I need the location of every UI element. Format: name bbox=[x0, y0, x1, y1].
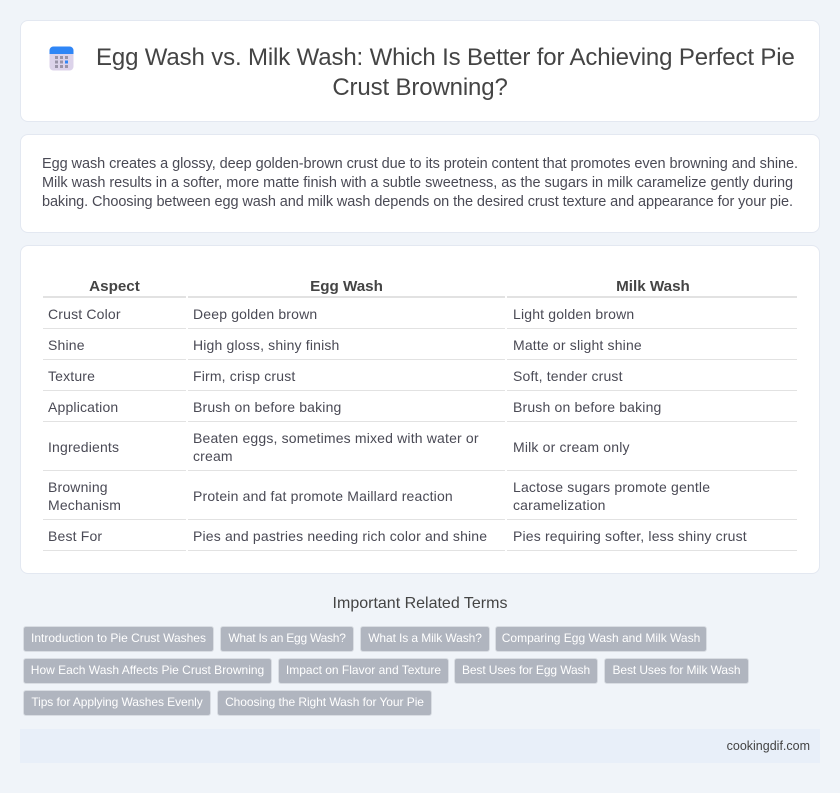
comparison table: High gloss, shiny finish bbox=[193, 337, 339, 353]
comparison table: cream bbox=[193, 448, 233, 464]
comparison table: Milk or cream only bbox=[513, 439, 630, 455]
comparison table: Firm, crisp crust bbox=[193, 368, 295, 384]
tags: related terms: Best Uses for Milk Wash bbox=[613, 663, 740, 677]
intro text: Milk wash results in a softer, more matte finish with a subtle sweetness, as the sugars in milk caramelize gently during bbox=[42, 175, 793, 191]
panel: comparison table bbox=[20, 245, 820, 574]
tags: related terms: How Each Wash Affects Pie Crust Browning bbox=[31, 663, 264, 677]
comparison table: Browning bbox=[48, 479, 108, 495]
intro text: baking. Choosing between egg wash and milk wash depends on the desired crust texture and appearance for your pie. bbox=[42, 194, 793, 210]
comparison table: Pies requiring softer, less shiny crust bbox=[513, 528, 747, 544]
comparison table: Shine bbox=[48, 337, 85, 353]
comparison table: Soft, tender crust bbox=[513, 368, 623, 384]
tags: related terms: Tips for Applying Washes Evenly bbox=[31, 695, 203, 709]
comparison table: Protein and fat promote Maillard reaction bbox=[193, 488, 453, 504]
comparison table: Matte or slight shine bbox=[513, 337, 642, 353]
comparison table: Brush on before baking bbox=[513, 399, 662, 415]
comparison table: Aspect bbox=[89, 278, 140, 295]
panel: intro bbox=[20, 134, 820, 233]
comparison table: caramelization bbox=[513, 497, 606, 513]
tags: related terms: Comparing Egg Wash and Milk Wash bbox=[502, 631, 700, 645]
title: Crust Browning? bbox=[332, 74, 508, 101]
tags: related terms: Introduction to Pie Crust Washes bbox=[31, 631, 206, 645]
title: Egg Wash vs. Milk Wash: Which Is Better for Achieving Perfect Pie bbox=[96, 44, 795, 71]
comparison table: Milk Wash bbox=[616, 278, 690, 295]
icon: calendar bbox=[50, 46, 74, 70]
tags: related terms: What Is a Milk Wash? bbox=[368, 631, 482, 645]
comparison table: Crust Color bbox=[48, 306, 121, 322]
comparison table: Light golden brown bbox=[513, 306, 634, 322]
comparison table bbox=[43, 278, 797, 551]
tags: related terms: Best Uses for Egg Wash bbox=[462, 663, 590, 677]
footer bbox=[20, 729, 820, 763]
comparison table: Lactose sugars promote gentle bbox=[513, 479, 710, 495]
comparison table: Best For bbox=[48, 528, 102, 544]
heading: related terms: Important Related Terms bbox=[333, 595, 507, 612]
comparison table: Deep golden brown bbox=[193, 306, 317, 322]
title bbox=[96, 44, 795, 101]
tags: related terms: Impact on Flavor and Texture bbox=[286, 663, 441, 677]
comparison table: Ingredients bbox=[48, 439, 119, 455]
tags: related terms: Choosing the Right Wash for Your Pie bbox=[225, 695, 424, 709]
comparison table: Mechanism bbox=[48, 497, 121, 513]
comparison table: Brush on before baking bbox=[193, 399, 342, 415]
comparison table: Application bbox=[48, 399, 118, 415]
footer source: cookingdif.com bbox=[727, 739, 810, 753]
comparison table: Egg Wash bbox=[310, 278, 383, 295]
panel: header bbox=[20, 20, 820, 122]
comparison table: Pies and pastries needing rich color and shine bbox=[193, 528, 487, 544]
tags: related terms: What Is an Egg Wash? bbox=[228, 631, 346, 645]
comparison table: Texture bbox=[48, 368, 95, 384]
comparison table: Beaten eggs, sometimes mixed with water or bbox=[193, 430, 479, 446]
intro text: Egg wash creates a glossy, deep golden-brown crust due to its protein content that promotes even browning and shine. bbox=[42, 156, 798, 172]
intro text bbox=[42, 156, 798, 210]
